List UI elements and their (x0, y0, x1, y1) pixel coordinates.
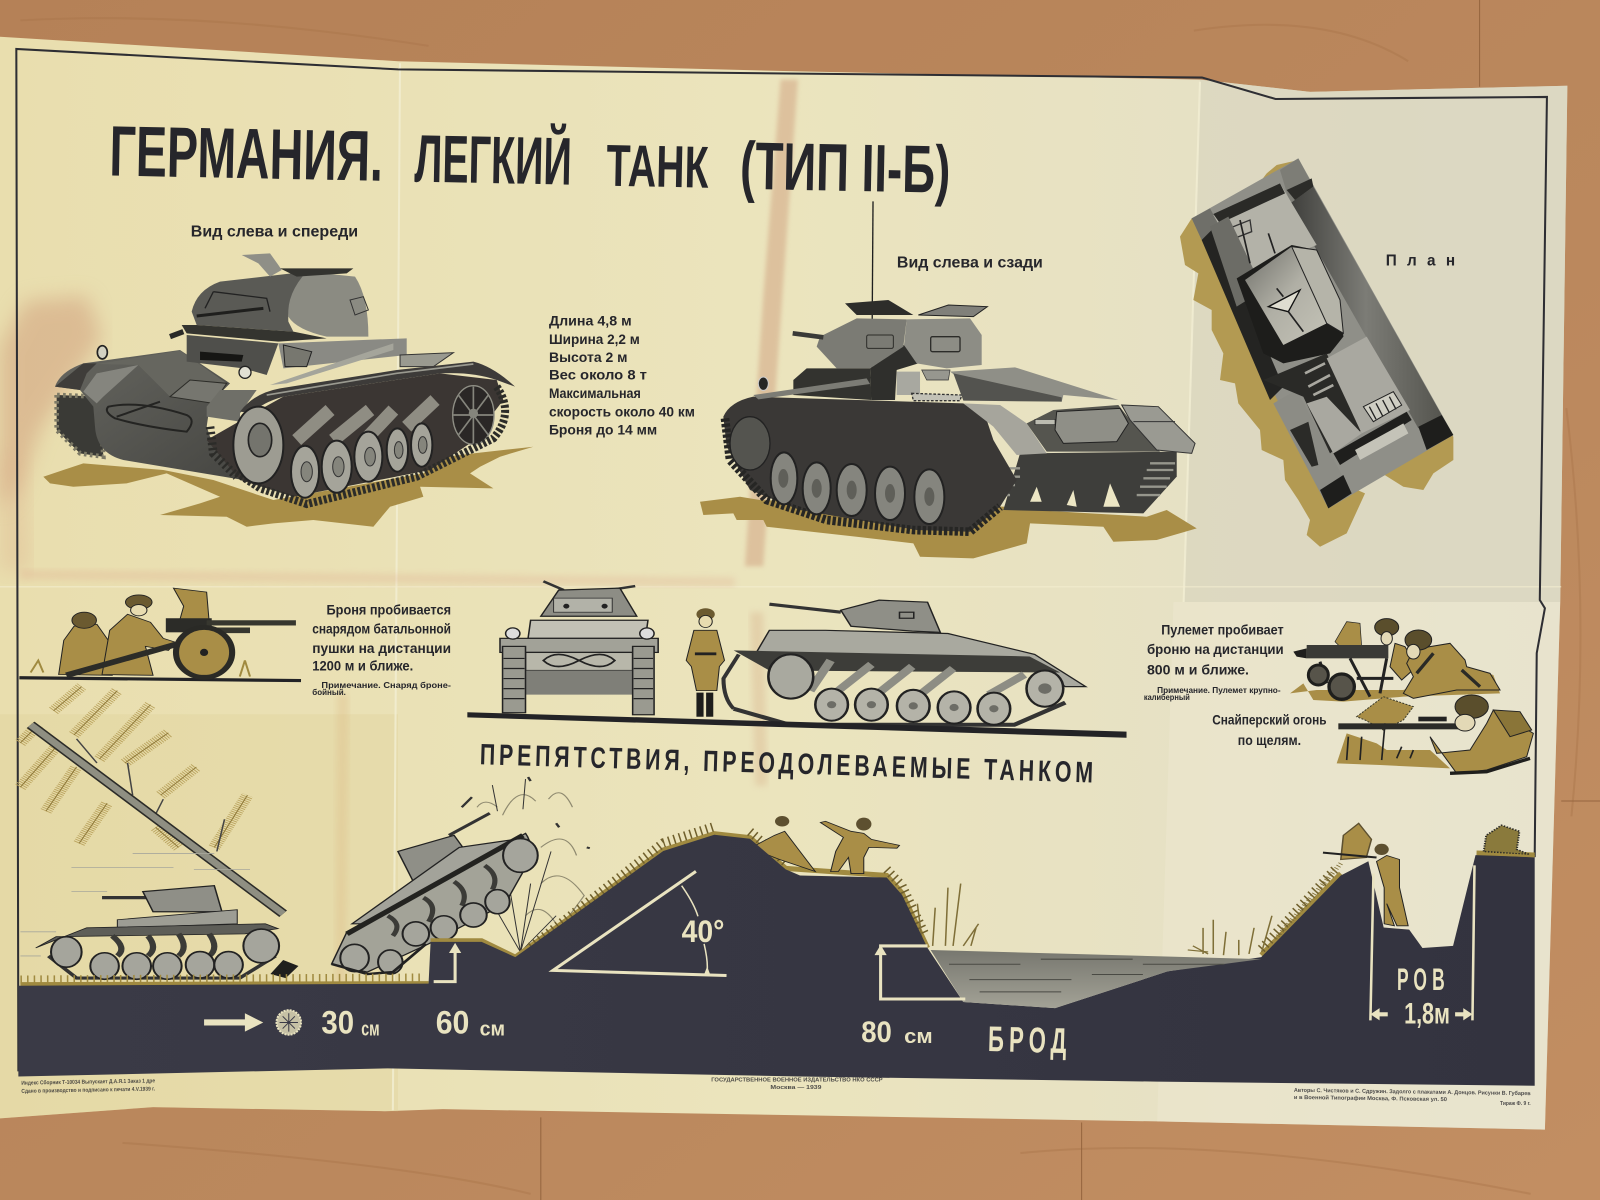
dimension: 40 degree slope: 40° (682, 913, 724, 949)
dimension: 40 degree slope (553, 871, 727, 976)
scene: rifleman in the ditch (1323, 844, 1408, 926)
text: machine-gun note: 800 м и ближе. (1147, 662, 1249, 678)
text: gun penetration note (312, 602, 451, 697)
title: ТАНК (606, 132, 710, 201)
scene: anti-tank gun with crew (19, 588, 301, 681)
view label: left front: Вид слева и спереди (191, 224, 358, 241)
specifications text block: Ширина 2,2 м (549, 332, 640, 348)
dimension: ditch width: 1,8м (1404, 997, 1450, 1030)
title: ГЕРМАНИЯ. (109, 112, 384, 197)
text: machine-gun note: броню на дистанции (1147, 642, 1284, 658)
footer: print details left: Сдано в производство и подписано к печати 4.V.1939 г. (21, 1087, 155, 1095)
text: sniper note (1212, 712, 1327, 749)
ground line under tank elevations (467, 712, 1127, 738)
title (109, 112, 951, 208)
dimension: 80 cm ford: см (904, 1026, 933, 1048)
tank: front elevation (500, 581, 658, 715)
dimension: ditch width: РОВ (1397, 963, 1445, 997)
grass along the terrain (20, 827, 1535, 985)
dimension: 80 cm ford (861, 945, 965, 1049)
footer: credits right: и в Военной Типографии Москва, Ф. Псковская ул. 50 (1294, 1094, 1447, 1103)
text: machine-gun note (1144, 623, 1284, 702)
dimension: 30 cm wheel obstacle: см (361, 1019, 380, 1041)
scene: soldiers throwing grenades on the crest (752, 816, 899, 874)
footer: publisher (711, 1078, 883, 1091)
tank: plan view from above (1180, 158, 1453, 547)
text: machine-gun note: Пулемет пробивает (1161, 623, 1284, 639)
footer: print details left: Индекс Сборник Т-10034 Выпускает Д.А.Я.1 Заказ 1 дре (21, 1077, 155, 1087)
tank: crossing a fallen log (36, 886, 298, 979)
title: (ТИП II-Б) (740, 129, 951, 208)
text: gun penetration note: Броня пробивается (327, 602, 451, 618)
footer: credits right: Тираж Ф. 9 г. (1500, 1101, 1531, 1107)
dimension: ditch width (1370, 865, 1474, 1030)
text: machine-gun note: калиберный (1144, 692, 1190, 702)
view label: left rear: Вид слева и сзади (897, 254, 1043, 271)
specifications text block: Длина 4,8 м (549, 314, 632, 330)
tank: left and rear view (700, 201, 1197, 558)
footer: print details left (21, 1077, 155, 1095)
dimension: 60 cm scarp (434, 943, 505, 1041)
dimension: 60 cm scarp: см (480, 1019, 505, 1041)
specifications text block: Вес около 8 т (549, 368, 647, 384)
text: gun penetration note: пушки на дистанции (312, 641, 451, 657)
specifications text block: Броня до 14 мм (549, 423, 657, 439)
specifications text block: Высота 2 м (549, 350, 628, 366)
tank: climbing a scarp with explosion (332, 777, 590, 974)
reeds at the ford (917, 884, 1272, 955)
title: ЛЕГКИЙ (414, 121, 573, 200)
dimension: 30 cm wheel obstacle (204, 1004, 380, 1041)
view label: plan: П л а н (1386, 252, 1455, 269)
footer: publisher: ГОСУДАРСТВЕННОЕ ВОЕННОЕ ИЗДАТЕЛЬСТВО НКО СССР (711, 1078, 883, 1084)
text: gun penetration note: Примечание. Снаряд броне- (321, 680, 451, 690)
footer: credits right (1294, 1087, 1531, 1107)
tank: side elevation (723, 600, 1086, 725)
specifications text block: Максимальная (549, 386, 641, 402)
scene: fallen tree (20, 687, 283, 956)
dark ground cross-section (18, 835, 1535, 1086)
dimension: 30 cm wheel obstacle: 30 (321, 1004, 354, 1041)
scene: machine-gun crew (1290, 619, 1500, 702)
footer: publisher: Москва — 1939 (770, 1085, 821, 1091)
specifications text block (549, 314, 695, 439)
text: sniper note: по щелям. (1238, 733, 1301, 749)
text: gun penetration note: снарядом батальонной (312, 622, 451, 638)
specifications text block: скорость около 40 км (549, 404, 695, 420)
section heading: obstacles: ПРЕПЯТСТВИЯ, ПРЕОДОЛЕВАЕМЫЕ ТАНКОМ (479, 739, 1094, 789)
text: gun penetration note: 1200 м и ближе. (312, 658, 413, 674)
dimension: 60 cm scarp: 60 (436, 1004, 469, 1041)
scene: sniper in bushes (1337, 695, 1533, 773)
ford water (931, 950, 1261, 1008)
footer: credits right: Авторы С. Чистяков и С. Сдружин. Задолго с плакатами А. Донцов. Рисунки В. Губарев (1294, 1087, 1531, 1097)
label: ford: БРОД (988, 1020, 1067, 1061)
figure: standing soldier for scale (686, 608, 724, 717)
tank: left and front view (43, 253, 533, 527)
text: sniper note: Снайперский огонь (1212, 712, 1327, 728)
shrubs on ditch edges (1274, 823, 1535, 940)
text: gun penetration note: бойный. (312, 687, 346, 697)
dimension: 80 cm ford: 80 (861, 1016, 892, 1049)
text: machine-gun note: Примечание. Пулемет крупно- (1157, 686, 1281, 695)
